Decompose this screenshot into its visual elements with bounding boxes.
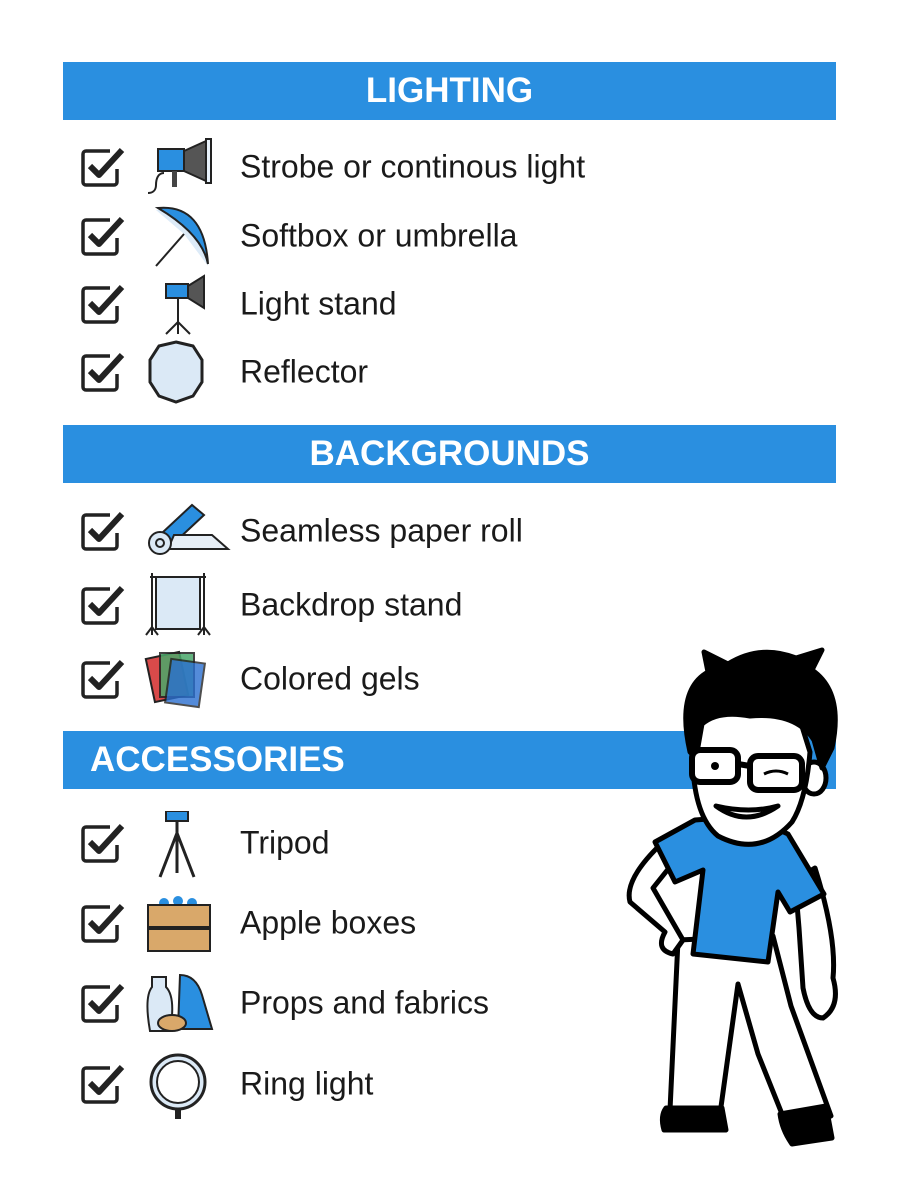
icon: backdrop stand	[145, 573, 211, 636]
hair	[686, 650, 835, 768]
item: backdrop stand	[81, 573, 462, 636]
label: Strobe or continous light	[240, 148, 585, 184]
left arm	[629, 845, 683, 954]
item: ring light	[81, 1054, 374, 1119]
header: accessories	[63, 731, 836, 789]
ear	[802, 762, 826, 794]
item: gels	[81, 650, 420, 708]
label: Apple boxes	[240, 904, 416, 940]
right arm	[795, 868, 835, 1018]
face	[692, 709, 810, 844]
shoes	[662, 1108, 726, 1130]
label: Colored gels	[240, 660, 420, 696]
icon: props	[146, 974, 214, 1032]
item: softbox	[81, 206, 518, 267]
label: Tripod	[240, 824, 330, 860]
icon: ring light	[150, 1054, 206, 1119]
icon: light stand	[165, 274, 205, 335]
label: Reflector	[240, 354, 368, 390]
item: reflector	[81, 340, 368, 404]
wink	[764, 771, 788, 774]
label: Seamless paper roll	[240, 512, 523, 548]
label: Ring light	[240, 1066, 373, 1102]
icon: strobe	[148, 138, 212, 194]
item: light stand	[81, 274, 397, 335]
shirt	[655, 816, 824, 962]
eye	[711, 762, 719, 770]
item: paper roll	[81, 504, 523, 555]
item: strobe	[81, 138, 585, 194]
label: Backdrop stand	[240, 586, 462, 622]
smile	[716, 806, 778, 817]
label: Props and fabrics	[240, 984, 489, 1020]
header: lighting	[63, 62, 836, 120]
header: backgrounds: BACKGROUNDS	[310, 434, 590, 473]
item: apple boxes	[81, 896, 416, 952]
glasses	[692, 750, 802, 790]
icon: reflector	[148, 340, 204, 404]
header: backgrounds	[63, 425, 836, 483]
item: props	[81, 974, 489, 1032]
icon: apple boxes	[147, 896, 211, 952]
icon: gels	[144, 650, 206, 708]
label: Softbox or umbrella	[240, 218, 517, 254]
icon: umbrella	[154, 206, 209, 267]
header: accessories: ACCESSORIES	[90, 740, 345, 779]
icon: tripod	[158, 811, 196, 878]
pants	[670, 936, 831, 1124]
label: Light stand	[240, 286, 397, 322]
character: winking man	[626, 648, 838, 1146]
item: tripod	[81, 811, 330, 878]
icon: paper roll	[148, 504, 231, 555]
header: lighting: LIGHTING	[366, 71, 533, 110]
